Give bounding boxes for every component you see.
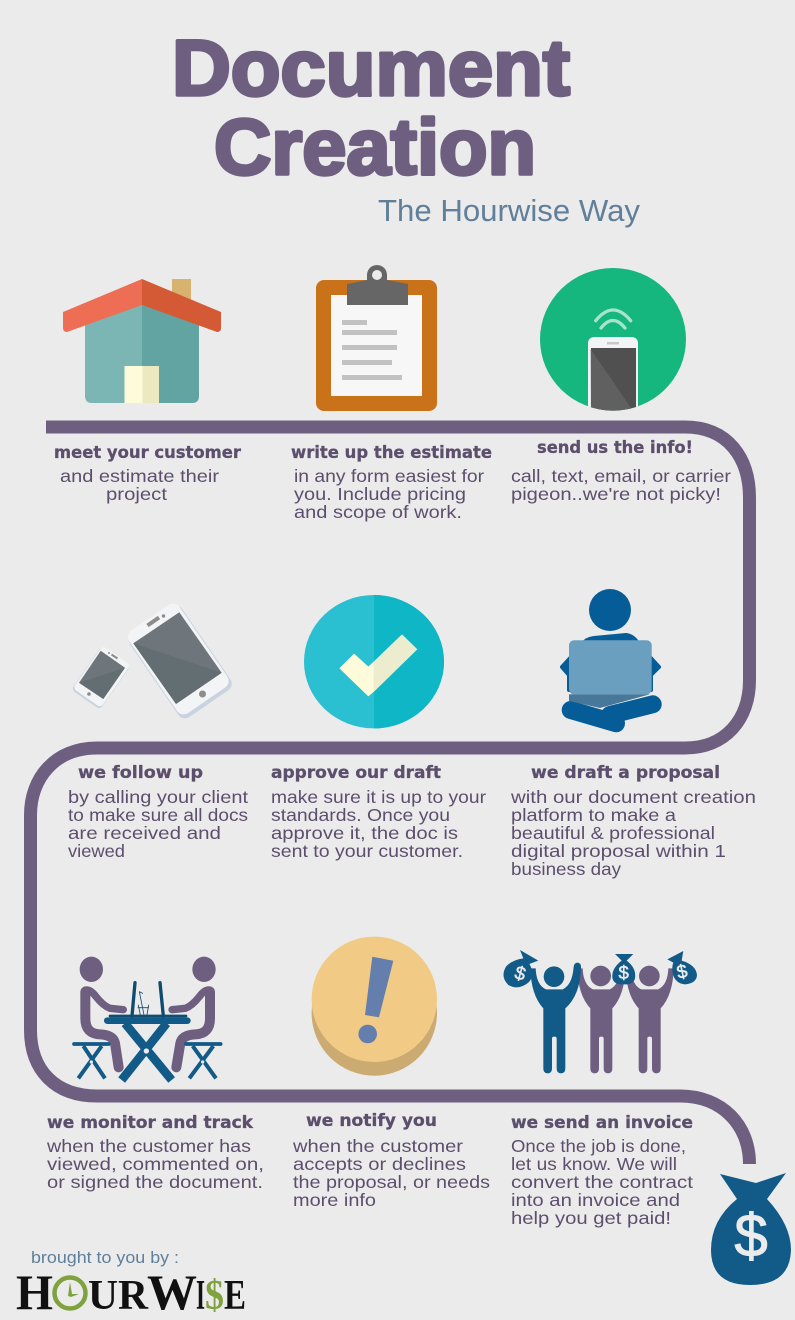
text: we send an invoice: help you get paid! (511, 1208, 671, 1228)
text: we notify you: the proposal, or needs (293, 1172, 490, 1192)
text: we send an invoice: Once the job is done, (511, 1136, 686, 1156)
text: we notify you: when the customer (292, 1136, 463, 1156)
logo: Hourwise: I (196, 1273, 205, 1319)
icon: three people holding money bags (503, 950, 697, 1073)
text: we monitor and track: or signed the document. (47, 1172, 263, 1192)
winding path (30, 427, 750, 1164)
title (172, 23, 570, 191)
logo: Hourwise: UR (88, 1273, 149, 1319)
text: meet your customer: project (106, 484, 167, 504)
text: approve our draft: sent to your customer. (271, 841, 463, 861)
text: we monitor and track: viewed, commented on, (47, 1154, 264, 1174)
text: we follow up: to make sure all docs (68, 805, 248, 825)
text: we send an invoice: convert the contract (511, 1172, 693, 1192)
icon: exclamation badge (312, 937, 437, 1076)
text: approve our draft: make sure it is up to your (271, 787, 486, 807)
text: send us the info (511, 438, 731, 504)
icon: clipboard (316, 265, 437, 411)
text: we draft a proposal: with our document creation (510, 787, 756, 807)
text: we send an invoice: into an invoice and (511, 1190, 680, 1210)
text: write up the estimate (291, 443, 492, 522)
text: approve our draft: standards. Once you (271, 805, 450, 825)
icon: three people holding money bags: $ (513, 962, 529, 985)
logo: Hourwise: W (147, 1264, 197, 1320)
text: we draft a proposal (510, 763, 756, 879)
text: we follow up: are received and (68, 823, 221, 843)
title: Document (172, 23, 570, 112)
icon: three people holding money bags: $ (618, 962, 629, 983)
icon: two phones (71, 600, 235, 721)
icon: two people at table (74, 957, 221, 1080)
text: we draft a proposal: beautiful & professional (511, 823, 715, 843)
text: write up the estimate: and scope of work. (294, 502, 462, 522)
text: send us the info: send us the info! (537, 438, 693, 457)
text: we send an invoice (511, 1113, 693, 1228)
text: we follow up: we follow up (78, 763, 203, 782)
text: we follow up (68, 763, 248, 861)
text: we monitor and track (46, 1113, 264, 1192)
text: we notify you: we notify you (306, 1111, 437, 1130)
icon: large money bag (711, 1173, 791, 1285)
icon: check mark circle (304, 595, 444, 728)
text: send us the info: pigeon..we're not picky! (511, 484, 721, 504)
text: meet your customer: and estimate their (60, 466, 219, 486)
title: Creation (214, 102, 536, 191)
text: we monitor and track: when the customer has (46, 1136, 251, 1156)
icon: person with laptop (562, 589, 659, 723)
logo: Hourwise: $ (205, 1273, 224, 1319)
logo: Hourwise: H (16, 1264, 53, 1320)
text: write up the estimate: write up the estimate (291, 443, 492, 462)
text: approve our draft: approve our draft (271, 763, 441, 782)
icon: three people holding money bags: $ (675, 960, 690, 983)
logo: Hourwise: E (224, 1273, 246, 1319)
text: we notify you (292, 1111, 490, 1210)
text: we notify you: accepts or declines (293, 1154, 466, 1174)
text: we draft a proposal: we draft a proposal (531, 763, 720, 782)
subtitle: The Hourwise Way (378, 193, 640, 228)
text: we monitor and track: we monitor and track (47, 1113, 254, 1132)
text: approve our draft (271, 763, 486, 861)
icon: house (63, 279, 221, 403)
text: we draft a proposal: digital proposal within 1 (511, 841, 726, 861)
icon: phone in green circle (540, 268, 686, 411)
text: send us the info: call, text, email, or carrier (511, 466, 731, 486)
text: approve our draft: approve it, the doc is (271, 823, 458, 843)
text: meet your customer: meet your customer (54, 443, 242, 462)
text: we notify you: more info (293, 1190, 376, 1210)
icon: large money bag: $ (734, 1202, 768, 1269)
text: meet your customer (54, 443, 242, 504)
brought to you by label: brought to you by : (31, 1248, 179, 1267)
text: write up the estimate: you. Include pricing (294, 484, 466, 504)
logo: Hourwise (16, 1264, 246, 1320)
text: we send an invoice: we send an invoice (511, 1113, 693, 1132)
text: we follow up: viewed (68, 841, 125, 861)
text: we draft a proposal: platform to make a (511, 805, 676, 825)
text: we send an invoice: let us know. We will (511, 1154, 677, 1174)
text: write up the estimate: in any form easiest for (294, 466, 484, 486)
text: we draft a proposal: business day (511, 859, 621, 879)
text: we follow up: by calling your client (68, 787, 248, 807)
